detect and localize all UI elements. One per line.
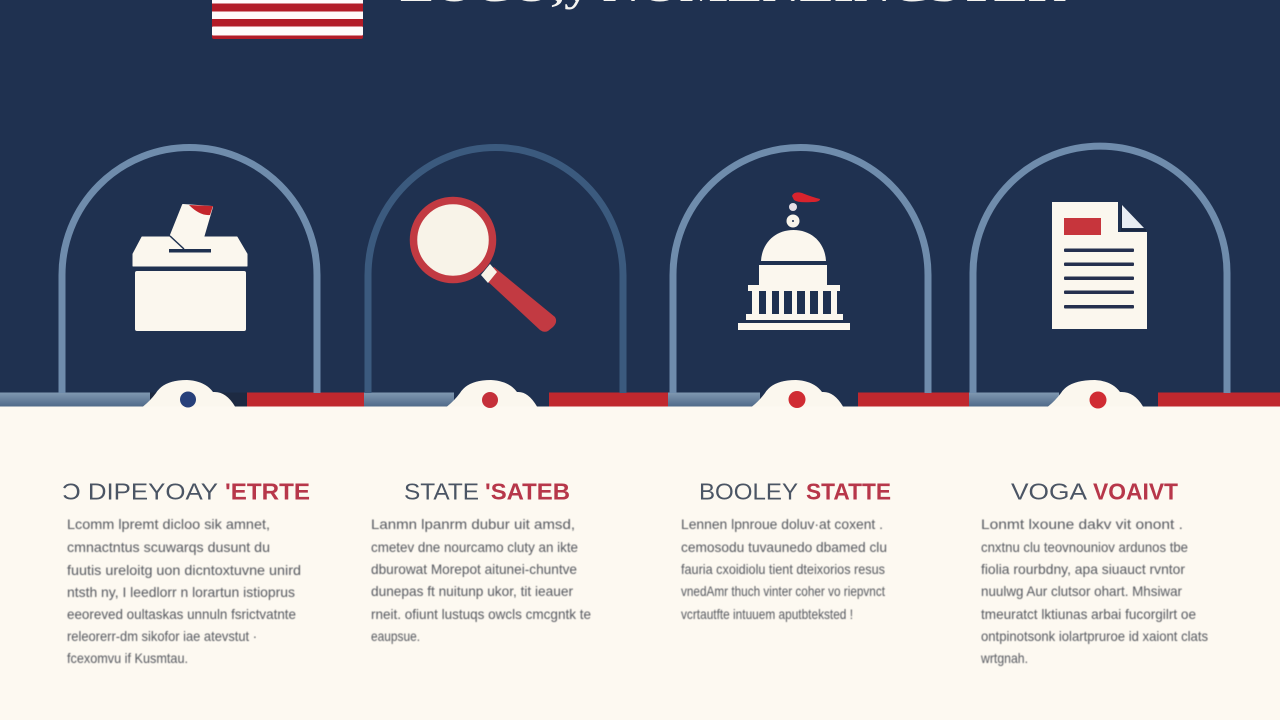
body 1: fcexomvu if Kusmtau. [67,650,188,666]
body 1: eeoreved oultaskas unnuln fsrictvatnte [67,606,296,622]
heading 1: 'ETRTE [225,478,310,504]
body 3: vcrtautfte intuuem aputbteksted ! [681,606,853,622]
body 4: Lonmt lxoune dakv vit onont . [981,516,1183,532]
column 3 text [681,478,891,622]
body 2 [371,516,591,644]
navy header background [0,0,1280,407]
heading 2 [404,478,570,504]
body 1: Lcomm lpremt dicloo sik amnet, [67,516,270,532]
heading 3: BOOLEY [699,478,798,504]
body 2: dunepas ft nuitunp ukor, tit ieauer [371,583,573,599]
icon: magnifying glass [414,200,556,332]
body 4: fiolia rourbdny, apa siuauct rvntor [981,561,1185,577]
heading 1 [62,478,310,504]
panel 2: magnifier [368,148,623,408]
body 4: nuulwg Aur clutsor ohart. Mhsiwar [981,583,1182,599]
arch 3 [673,148,928,393]
column 1 text [62,478,310,666]
heading 3 [699,478,891,504]
heading 4 [1011,478,1179,504]
heading 4: VOAIVT [1093,478,1179,504]
marker 3 [752,380,843,408]
body 1: cmnactntus scuwarqs dusunt du [67,539,270,555]
cream lower background [0,406,1280,720]
icon: capitol building [738,192,850,330]
arch 1 [62,148,317,393]
panel 1: ballot [62,148,317,408]
marker 4 [1048,380,1143,408]
segmented band [0,392,1280,406]
flag icon [212,0,363,39]
heading 2: STATE [404,478,479,504]
body 4: ontpinotsonk iolartpruroe id xaiont clats [981,628,1208,644]
marker 1 [143,380,235,408]
body 3: Lennen lpnroue doluv·at coxent . [681,516,883,532]
panel 4: document [973,146,1227,408]
column 2 text [371,478,591,644]
body 2: rneit. ofiunt lustuqs owcls cmcgntk te [371,606,591,622]
arch 4 [973,146,1227,393]
body 4 [980,516,1208,666]
panel 3: capitol [673,148,928,408]
body 1: fuutis ureloitg uon dicntoxtuvne unird [67,562,301,578]
body 3: fauria cxoidiolu tient dteixorios resus [681,561,885,577]
body 2: dburowat Morepot aitunei-chuntve [371,561,577,577]
body 4: cnxtnu clu teovnouniov ardunos tbe [981,539,1188,555]
body 1: releorerr-dm sikofor iae atevstut · [67,628,257,644]
body 4: tmeuratct lktiunas arbai fucorgilrt oe [981,606,1196,622]
heading 2: 'SATEB [485,478,570,504]
icon: ballot box [133,205,247,331]
heading 1: Ɔ DIPEYOAY [62,478,218,504]
arch 2 [368,148,623,393]
body 1: ntsth ny, I leedlorr n lorartun istioprus [67,584,295,600]
icon: document [1052,202,1147,329]
heading 4: VOGA [1011,478,1087,504]
body 2: Lanmn lpanrm dubur uit amsd, [371,516,575,532]
body 3 [681,516,887,622]
heading 3: STATTE [806,478,891,504]
body 2: cmetev dne nourcamo cluty an ikte [371,539,578,555]
body 3: vnedAmr thuch vinter coher vo riepvnct [681,583,885,599]
body 2: eaupsue. [371,628,420,644]
body 4: wrtgnah. [980,650,1028,666]
column 4 text [980,478,1208,666]
body 3: cemosodu tuvaunedo dbamed clu [681,539,887,555]
body 1 [67,516,301,666]
marker 2 [447,380,537,408]
